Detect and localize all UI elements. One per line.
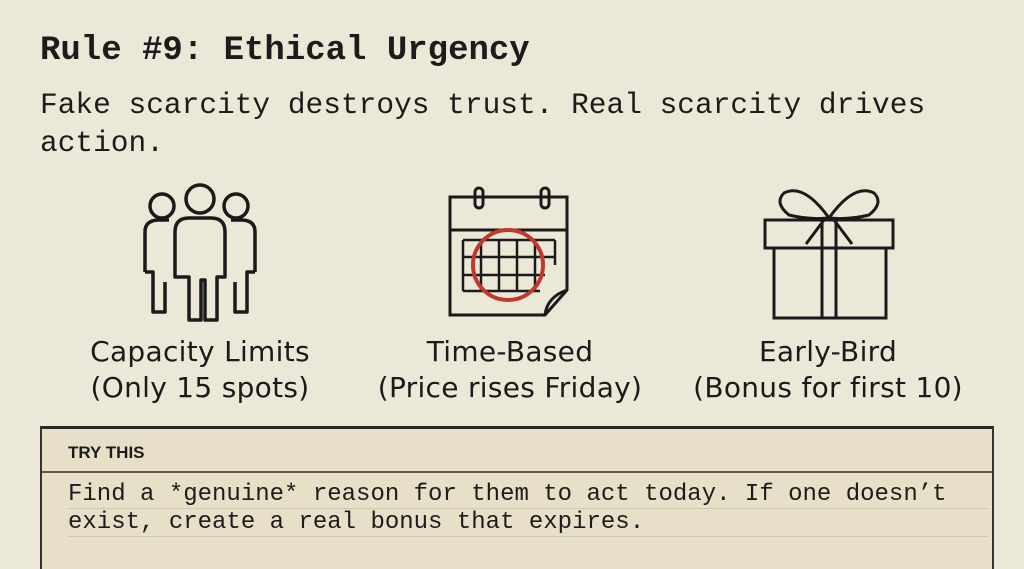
label: early bird: (Bonus for first 10) [693,371,963,404]
label: time [378,335,642,404]
icon: calendar [448,186,568,316]
label: capacity: (Only 15 spots) [90,371,309,404]
label: early bird: Early-Bird [759,335,897,368]
label: time: Time-Based [427,335,593,368]
icon: gift [764,189,894,320]
label: time: (Price rises Friday) [378,371,642,404]
label: capacity [90,335,310,404]
icon: people [143,183,257,322]
label: early bird [693,335,963,404]
label: capacity: Capacity Limits [90,335,310,368]
panel body: Find a *genuine* reason for them to act today. If one doesn’t exist, create a real bonus that expires. [68,481,947,536]
title: Rule #9: Ethical Urgency [40,32,530,70]
panel header: TRY THIS [68,443,145,462]
panel: try this [40,426,994,569]
subtitle: Fake scarcity destroys trust. Real scarcity drives action. [40,88,925,160]
